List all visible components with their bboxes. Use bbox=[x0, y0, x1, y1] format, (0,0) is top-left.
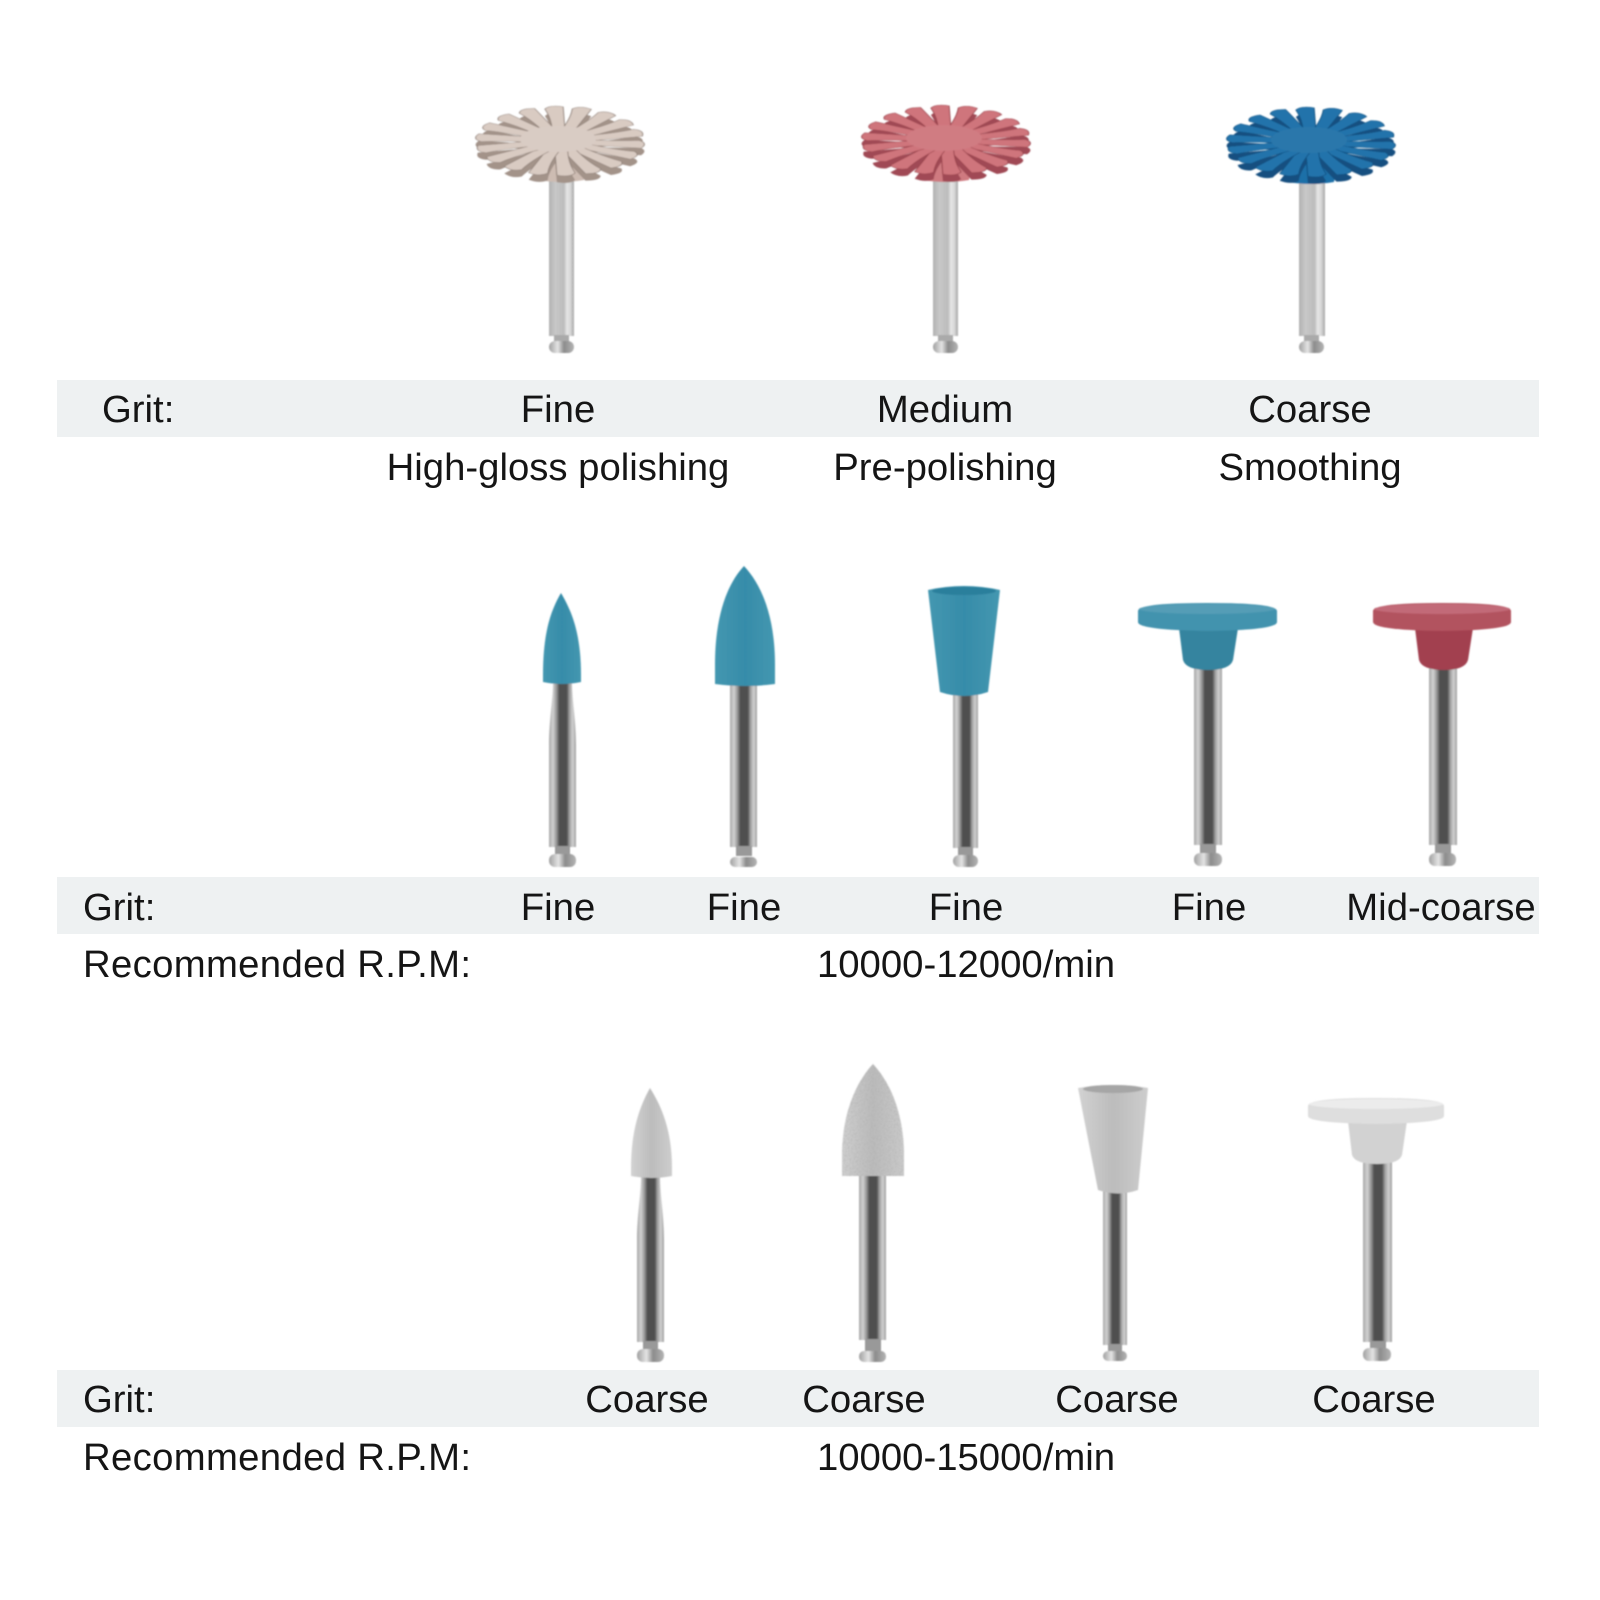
grit band: Coarse bbox=[585, 1378, 709, 1421]
grit band bbox=[57, 380, 1539, 437]
recommended speed: Recommended R.P.M: bbox=[83, 943, 471, 986]
grit band: Fine bbox=[929, 886, 1003, 929]
tool: large grey flame bbox=[842, 1064, 904, 1362]
tool: small blue flame bbox=[543, 593, 581, 867]
grit band: Medium bbox=[877, 388, 1013, 431]
tool: pink spiral wheel bbox=[859, 104, 1033, 353]
panel: fine grit tools row bbox=[57, 566, 1539, 986]
recommended speed: 10000-15000/min bbox=[817, 1436, 1115, 1479]
grit band: Coarse bbox=[1248, 388, 1372, 431]
recommended speed bbox=[83, 1436, 1115, 1479]
tool: large blue flame bbox=[715, 566, 775, 867]
grit band: Fine bbox=[1172, 886, 1246, 929]
panel: coarse grit tools row bbox=[57, 1064, 1539, 1479]
grit band: Fine bbox=[707, 886, 781, 929]
recommended speed: Recommended R.P.M: bbox=[83, 1436, 471, 1479]
grit band: Coarse bbox=[1312, 1378, 1436, 1421]
tool: blue disc bbox=[1138, 603, 1277, 866]
grit band: Fine bbox=[521, 388, 595, 431]
grit band bbox=[57, 1370, 1539, 1427]
grit band: Fine bbox=[521, 886, 595, 929]
grit band: Coarse bbox=[1055, 1378, 1179, 1421]
panel: spiral wheels row bbox=[57, 104, 1539, 489]
tool: grey cup bbox=[1078, 1085, 1148, 1361]
tool: red disc bbox=[1373, 603, 1511, 866]
grit band: Grit: bbox=[102, 388, 174, 431]
grit band: Mid-coarse bbox=[1346, 886, 1536, 929]
grit band: Grit: bbox=[83, 886, 155, 929]
tool: blue cup bbox=[928, 586, 1000, 867]
tool: small grey flame bbox=[631, 1088, 672, 1362]
use labels: High-gloss polishing bbox=[387, 446, 729, 489]
tool: blue spiral wheel bbox=[1224, 106, 1398, 353]
use labels: Smoothing bbox=[1218, 446, 1402, 489]
use labels: Pre-polishing bbox=[833, 446, 1057, 489]
grit band: Coarse bbox=[802, 1378, 926, 1421]
grit band bbox=[57, 877, 1539, 934]
tool: grey disc bbox=[1308, 1098, 1444, 1361]
tool: beige spiral wheel bbox=[473, 105, 647, 353]
use labels bbox=[387, 446, 1402, 489]
recommended speed: 10000-12000/min bbox=[817, 943, 1115, 986]
grit band: Grit: bbox=[83, 1378, 155, 1421]
recommended speed bbox=[83, 943, 1115, 986]
